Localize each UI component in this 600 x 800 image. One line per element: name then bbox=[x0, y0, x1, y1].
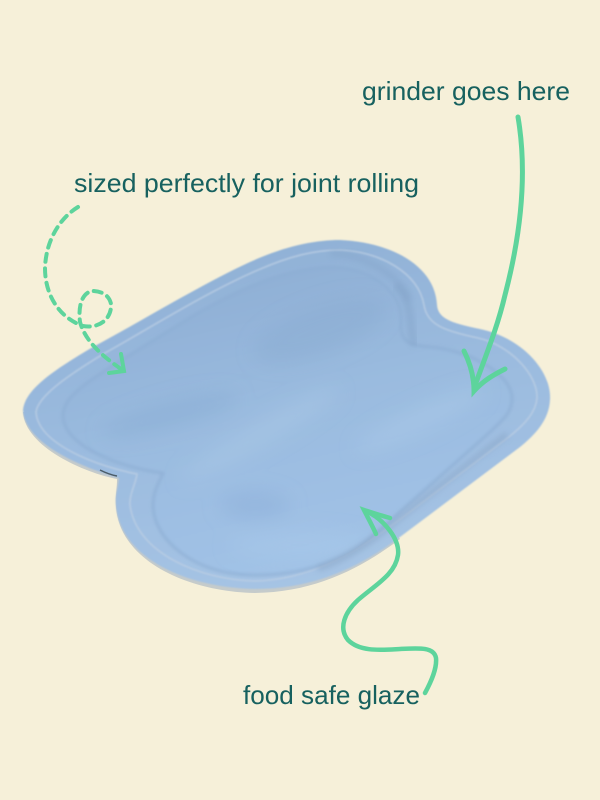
label: grinder: grinder goes here bbox=[362, 76, 570, 106]
plate bbox=[23, 240, 550, 593]
label: glaze: food safe glaze bbox=[243, 680, 420, 710]
arrow: food safe glaze bbox=[343, 510, 436, 693]
plate floor bbox=[63, 267, 512, 575]
rim highlight bbox=[36, 250, 537, 581]
infographic canvas bbox=[22, 81, 569, 710]
glaze mottling bbox=[99, 284, 489, 559]
rim groove shadow, lower right bbox=[320, 436, 505, 568]
arrow: dashed loop to plate edge bbox=[45, 207, 124, 373]
plate underside edge bbox=[23, 400, 400, 593]
plate rim bbox=[23, 240, 550, 589]
arrow: grinder bbox=[464, 117, 522, 391]
rim shading, notch bbox=[395, 285, 415, 345]
notch shadow line bbox=[100, 470, 117, 476]
label: joint rolling: sized perfectly for joint rolling bbox=[74, 168, 419, 198]
rim shading, back bbox=[330, 253, 410, 300]
